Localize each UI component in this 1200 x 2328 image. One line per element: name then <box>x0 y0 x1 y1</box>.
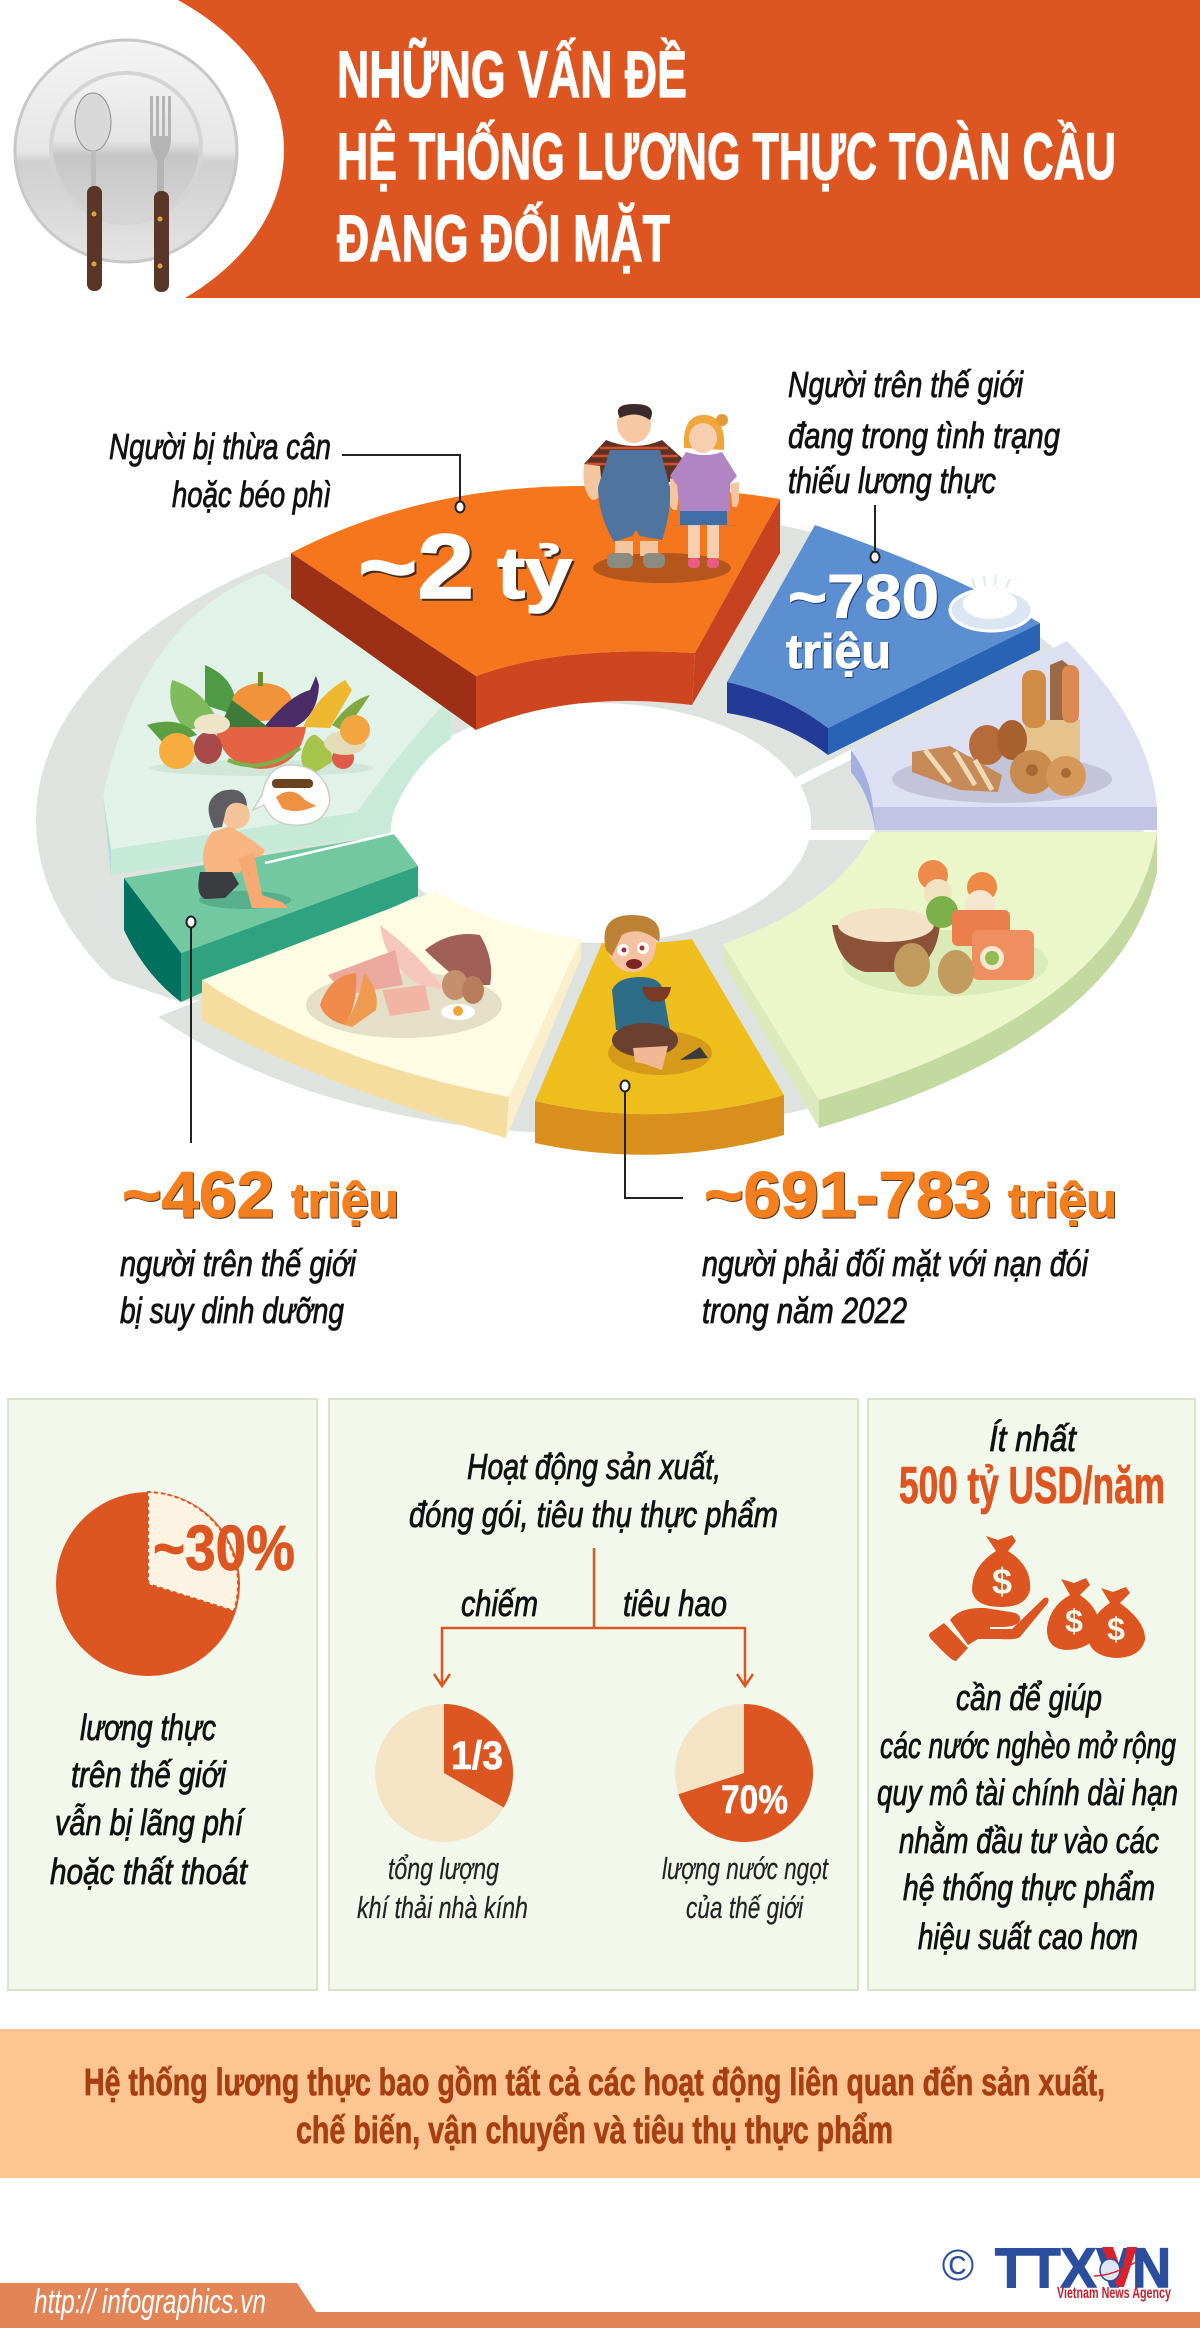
stat: 780 million <box>786 563 939 679</box>
title <box>337 37 1116 275</box>
heading: activities: đóng gói, tiêu thụ thực phẩm <box>409 1494 778 1535</box>
callout: malnutrition: người trên thế giới <box>120 1243 357 1284</box>
pie chart: one third: 1/3 <box>451 1734 503 1778</box>
pie chart: 30 percent wasted <box>56 1492 295 1676</box>
pie chart: 70 percent <box>675 1704 813 1842</box>
icon: vegetables and fruit <box>147 665 374 776</box>
callout: malnutrition: ~462 <box>122 1158 274 1231</box>
icon: rice bowl <box>950 575 1032 631</box>
text: pie captions: khí thải nhà kính <box>357 1890 528 1925</box>
panel: finance <box>868 1399 1195 1990</box>
callout: hunger: ~691-783 <box>704 1158 991 1231</box>
icon: meat and fish <box>306 925 502 1038</box>
callout: malnutrition: bị suy dinh dưỡng <box>120 1290 344 1331</box>
callout: food shortage label <box>788 364 1060 562</box>
callout: hunger: người phải đối mặt với nạn đói <box>702 1243 1089 1284</box>
text: finance description: $ <box>1065 1603 1083 1639</box>
icon: hungry boy with speech bubble <box>198 765 330 909</box>
footer strip: http:// infographics.vn <box>34 2283 266 2321</box>
panel: production and consumption <box>329 1399 858 1990</box>
pie chart: one third <box>375 1704 513 1842</box>
stat: two billion <box>358 516 572 618</box>
icon: bakery <box>892 660 1112 803</box>
text: waste description: trên thế giới <box>71 1754 227 1795</box>
text: pie captions: tổng lượng <box>388 1851 499 1886</box>
panel: yellow hunger segment <box>535 939 784 1155</box>
ring base <box>36 506 1144 1134</box>
panel: definition banner <box>0 2029 1200 2178</box>
heading: 500 billion USD <box>899 1418 1165 1515</box>
text: pie captions: của thế giới <box>686 1890 804 1925</box>
callout: overweight label <box>109 426 464 515</box>
panel: blue food shortage segment <box>727 525 1040 755</box>
text: finance description <box>877 1561 1178 1957</box>
panel: definition banner: chế biến, vận chuyển và tiêu thụ thực phẩm <box>296 2110 893 2152</box>
icon: crying child <box>604 915 712 1075</box>
panel: teal malnutrition segment <box>124 833 418 1002</box>
callout: hunger <box>620 1080 1117 1331</box>
callout: hunger: triệu <box>1008 1175 1117 1228</box>
stat: two billion: ~2 <box>358 516 474 618</box>
heading: activities <box>409 1446 778 1535</box>
arrows: branching flow <box>434 1548 753 1686</box>
panel: mint vegetable segment <box>103 573 451 875</box>
panel: cream meat segment <box>202 891 581 1138</box>
stat: two billion: tỷ <box>497 534 572 614</box>
panel: light green prepared food segment <box>723 832 1157 1128</box>
pie chart: 30 percent wasted: ~30% <box>153 1512 295 1584</box>
stat: 780 million: ~780 <box>788 563 939 632</box>
text: finance description: $ <box>992 1561 1012 1602</box>
logo: TTXVN: TTXVN <box>995 2236 1171 2299</box>
callout: malnutrition: triệu <box>291 1175 399 1228</box>
arrows: branching flow: chiếm <box>461 1583 538 1624</box>
callout: hunger: trong năm 2022 <box>702 1290 907 1331</box>
text: waste description: vẫn bị lãng phí <box>55 1802 245 1843</box>
chart: food system ring <box>36 364 1157 1331</box>
heading: activities: Hoạt động sản xuất, <box>467 1446 721 1487</box>
text: waste description <box>50 1707 249 1892</box>
callout: food shortage label: Người trên thế giới <box>788 364 1024 405</box>
arrows: branching flow: tiêu hao <box>623 1583 727 1624</box>
callout: overweight label: Người bị thừa cân <box>109 426 331 467</box>
callout: malnutrition <box>120 916 399 1331</box>
footer strip <box>0 2283 1200 2328</box>
panel: orange overweight segment <box>291 486 780 730</box>
text: waste description: lương thực <box>80 1707 216 1748</box>
text: finance description: hiệu suất cao hơn <box>918 1916 1138 1957</box>
callout: food shortage label: thiếu lương thực <box>788 460 996 501</box>
header banner <box>0 0 1200 298</box>
icon: prepared food <box>832 860 1048 996</box>
callout: food shortage label: đang trong tình trạng <box>788 415 1060 456</box>
title: NHỮNG VẤN ĐỀ <box>337 37 687 111</box>
title: ĐANG ĐỐI MẶT <box>337 201 670 275</box>
icon: plate with spoon and fork <box>15 40 237 292</box>
panel: food waste <box>8 1399 317 1990</box>
stat: 780 million: triệu <box>786 626 891 679</box>
text: finance description: $ <box>1107 1611 1125 1647</box>
icon: hand with money bags <box>929 1535 1145 1661</box>
text: pie captions <box>357 1851 829 1925</box>
callout: overweight label: hoặc béo phì <box>172 474 331 515</box>
heading: 500 billion USD: Ít nhất <box>989 1418 1078 1459</box>
pie chart: 70 percent: 70% <box>721 1778 788 1822</box>
icon: overweight couple <box>583 404 739 583</box>
panel: lavender bakery segment <box>851 641 1157 830</box>
logo: TTXVN: © <box>942 2241 974 2290</box>
text: pie captions: lượng nước ngọt <box>662 1851 829 1886</box>
text: waste description: hoặc thất thoát <box>50 1851 249 1892</box>
text: finance description: cần để giúp <box>956 1677 1102 1718</box>
